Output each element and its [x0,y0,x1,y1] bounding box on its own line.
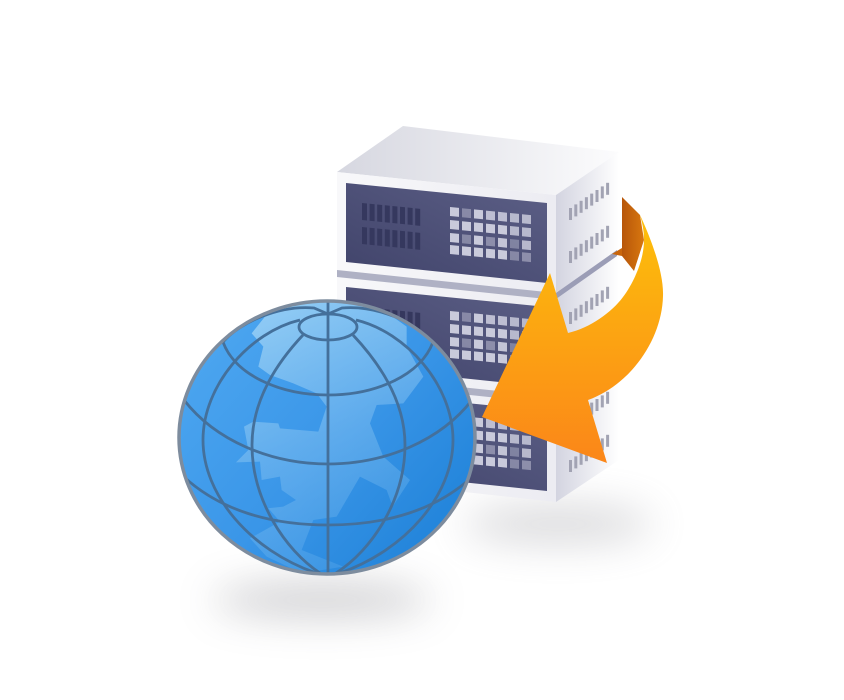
server front gaps [337,270,556,404]
globe outline [179,301,475,574]
server rack [337,126,619,502]
server side vents [569,183,609,472]
illustration: globe and server with arrow [177,126,664,636]
server right face gaps [556,250,617,403]
server unit 2 panel [346,287,547,387]
shadow: globe [212,582,432,618]
server unit 3 panel [346,391,547,491]
central meridian [327,300,329,574]
server unit 1 panel [346,183,547,283]
globe ocean [179,301,475,574]
upper polar arcs [223,308,328,342]
latitude lines [223,342,433,395]
globe [179,300,475,574]
globe grid lines [184,300,472,574]
polar cap [299,314,357,340]
server right face [556,152,619,502]
server front face [337,172,556,502]
globe continents [236,300,423,573]
arrow: orange curved arrow into server [482,197,663,463]
outer meridians [203,320,316,573]
server top face [337,126,619,195]
arrow tail inner fold [622,197,644,271]
arrow body [482,215,663,463]
inner meridians [252,335,320,573]
shadow: server [463,504,653,544]
